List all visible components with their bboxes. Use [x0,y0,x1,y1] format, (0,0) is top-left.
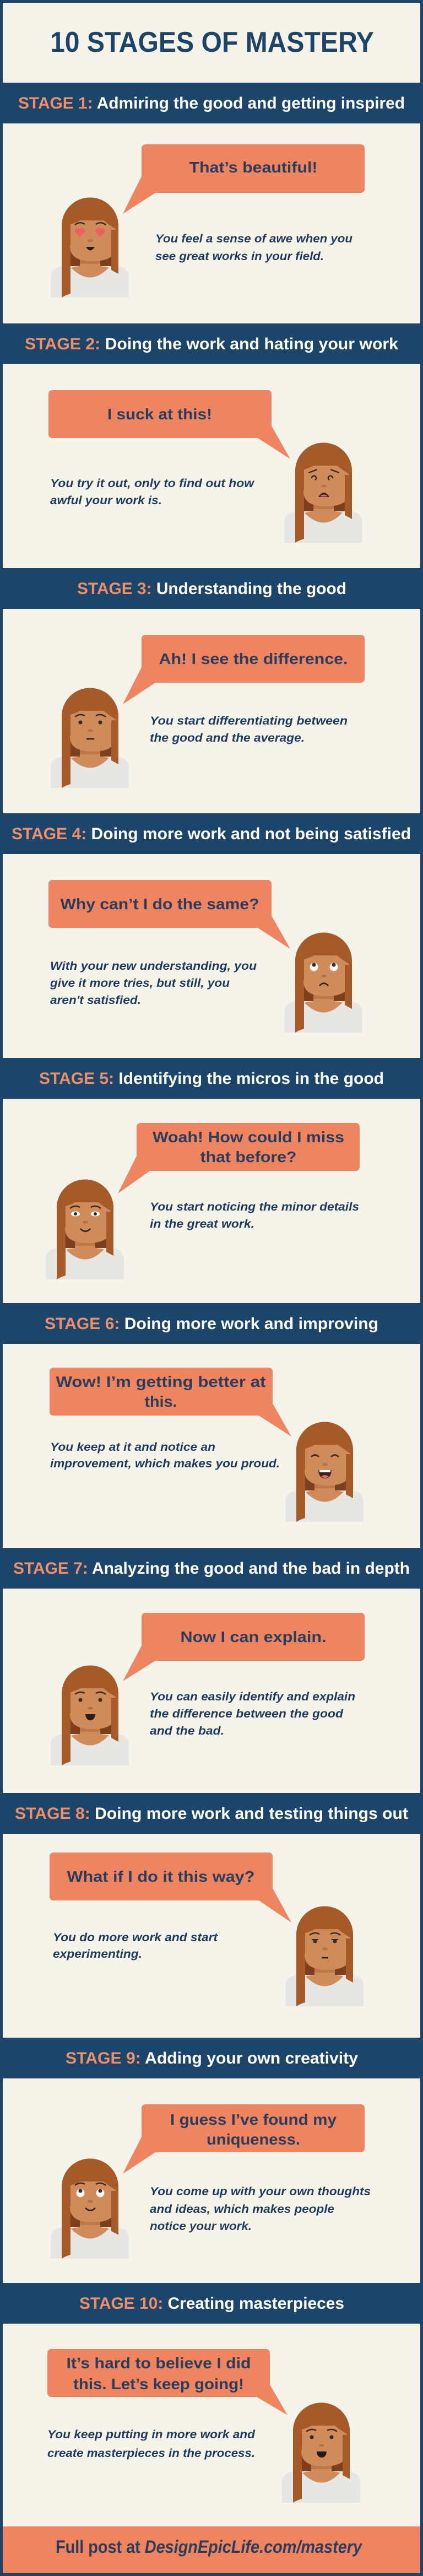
character 8: thinking [285,1907,364,2006]
speech bubble 3 [123,635,365,704]
speech bubble 10: this. Let’s keep going! [73,2375,244,2393]
character 7: happy talking [51,1665,129,1765]
speech bubble 9 [123,2104,365,2174]
description 9: notice your work. [150,2220,252,2233]
description 2: You try it out, only to find out how [50,477,255,490]
stage 2 [3,335,420,568]
description 10: create masterpieces in the process. [47,2447,255,2460]
speech bubble 2 [48,390,290,459]
description 8 [53,1931,218,1961]
title: 10 STAGES OF MASTERY [50,26,374,58]
stage 8 header: STAGE 8: Doing more work and testing things out [15,1805,408,1823]
footer text: Full post at DesignEpicLife.com/mastery [56,2537,363,2557]
speech bubble 8: What if I do it this way? [67,1868,254,1885]
character 10: proud [282,2402,360,2503]
speech bubble 9: I guess I’ve found my [170,2111,337,2128]
description 1: You feel a sense of awe when you [155,233,352,245]
description 6 [50,1441,280,1470]
speech bubble 7 [123,1613,365,1681]
speech bubble 10 [47,2349,288,2415]
speech bubble 4: Why can’t I do the same? [61,895,259,912]
stage 4 header: STAGE 4: Doing more work and not being satisfied [12,825,411,843]
description 1: see great works in your field. [155,250,324,263]
speech bubble 2: I suck at this! [107,406,212,423]
stage 1 [3,94,420,323]
description 6: You keep at it and notice an [50,1441,215,1454]
character 5: wide eyes, smile [46,1179,124,1279]
stage 9 [3,2049,420,2283]
description 3: the good and the average. [150,732,305,744]
stage 5 header: STAGE 5: Identifying the micros in the good [39,1070,384,1088]
speech bubble 10: It’s hard to believe I did [66,2354,251,2372]
stage 1 header: STAGE 1: Admiring the good and getting inspired [18,94,405,112]
description 3: You start differentiating between [150,715,348,727]
character 3: neutral [51,688,129,788]
stage 4 [3,825,420,1058]
description 2 [50,477,255,507]
description 9: You come up with your own thoughts [150,2185,371,2198]
description 7: and the bad. [150,1725,224,1737]
description 7: the difference between the good [150,1708,344,1720]
stage 2 header: STAGE 2: Doing the work and hating your work [25,335,398,353]
description 5: in the great work. [150,1218,254,1230]
description 7: You can easily identify and explain [150,1691,355,1703]
title panel [3,3,420,83]
speech bubble 7: Now I can explain. [181,1628,326,1645]
description 5: You start noticing the minor details [150,1201,359,1213]
stage 8 [3,1805,420,2038]
speech bubble 8 [50,1853,291,1922]
speech bubble 1: That’s beautiful! [189,159,317,176]
speech bubble 9: uniqueness. [207,2131,300,2148]
speech bubble 6: this. [144,1393,177,1410]
description 1 [155,233,352,263]
description 4: aren't satisfied. [50,994,141,1007]
stage 5 [3,1070,420,1303]
description 9 [150,2185,371,2233]
stage 7 [3,1559,420,1793]
description 10: You keep putting in more work and [47,2428,256,2441]
speech bubble 6: Wow! I’m getting better at [56,1373,265,1390]
stage 6 header: STAGE 6: Doing more work and improving [45,1315,378,1333]
character 2: distressed [284,443,362,543]
character 9: looking up, smile [51,2159,129,2259]
description 6: improvement, which makes you proud. [50,1457,280,1470]
description 2: awful your work is. [50,494,162,507]
stage 9 header: STAGE 9: Adding your own creativity [66,2049,358,2067]
stage 7 header: STAGE 7: Analyzing the good and the bad in depth [13,1559,410,1578]
speech bubble 5 [118,1123,360,1194]
speech bubble 5: that before? [200,1148,296,1165]
description 9: and ideas, which makes people [150,2203,334,2216]
stage 10 header: STAGE 10: Creating masterpieces [79,2294,344,2313]
description 4 [50,960,257,1007]
description 4: give it more tries, but still, you [50,977,230,990]
description 10 [47,2428,256,2460]
stage 10 [3,2294,420,2526]
description 8: experimenting. [53,1948,142,1961]
stage 6 [3,1315,420,1548]
stage 3 header: STAGE 3: Understanding the good [77,580,346,598]
character 4: looking up, frown [284,932,362,1033]
description 8: You do more work and start [53,1931,218,1944]
character 6: laughing [285,1422,364,1522]
description 3 [150,715,348,744]
description 7 [150,1691,355,1737]
speech bubble 3: Ah! I see the difference. [159,650,348,667]
speech bubble 4 [48,880,290,949]
character 1: heart eyes [51,197,129,298]
description 4: With your new understanding, you [50,960,257,973]
description 5 [150,1201,359,1230]
stage 3 [3,580,420,813]
speech bubble 5: Woah! How could I miss [153,1128,344,1146]
speech bubble 6 [50,1368,291,1436]
footer [3,2526,420,2573]
speech bubble 1 [123,144,365,214]
